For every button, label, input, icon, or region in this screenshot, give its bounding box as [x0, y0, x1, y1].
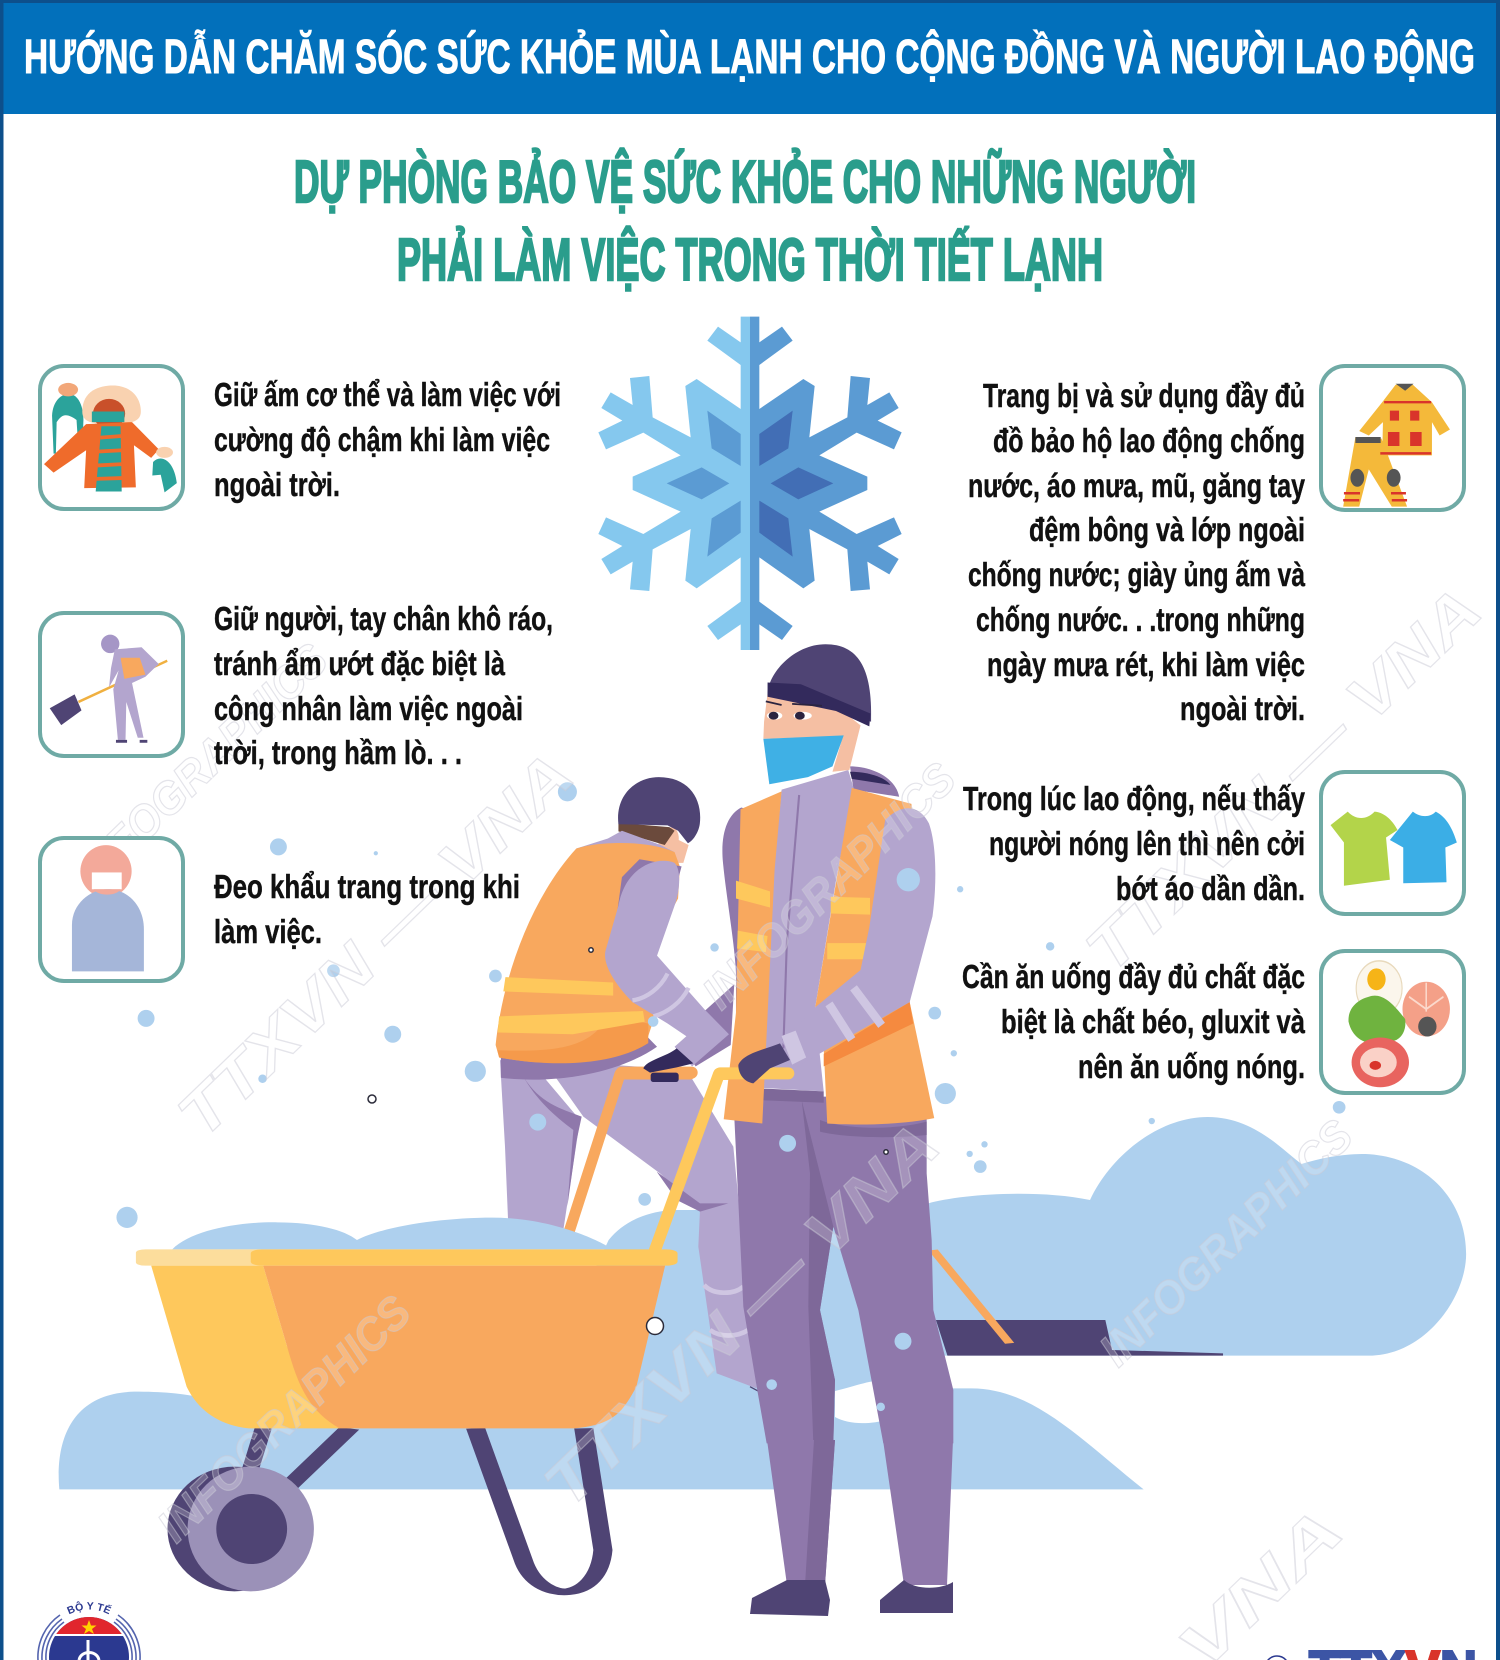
tip text 1: Giữ ấm cơ thể và làm việc với — [214, 376, 561, 413]
icon frame: protective gear — [1321, 366, 1464, 510]
tip text 5: bớt áo dần dần. — [1116, 870, 1305, 907]
watermarks: INFOGRAPHICS — [692, 752, 966, 1019]
watermarks: INFOGRAPHICS — [147, 1285, 421, 1552]
tip text 4: chống nước; giày ủng ấm và — [968, 556, 1305, 593]
small outlined circles — [368, 948, 888, 1334]
icon: protective suit — [1343, 384, 1450, 507]
yellow cross handle and front glove — [720, 1043, 790, 1083]
tip text 1 — [214, 376, 561, 503]
wheelbarrow — [136, 1074, 785, 1592]
icon: two t-shirts — [1331, 812, 1457, 886]
tip text 6: nên ăn uống nóng. — [1078, 1048, 1305, 1085]
tip text 6: Cần ăn uống đầy đủ chất đặc — [962, 958, 1305, 995]
tip text 6 — [962, 958, 1305, 1085]
tip text 3: Đeo khẩu trang trong khi — [214, 868, 520, 905]
icon frame: shirts — [1321, 772, 1464, 914]
icon: person wearing mask — [72, 845, 144, 971]
icon: snowflake — [598, 317, 902, 650]
panel: tip nutrition — [962, 951, 1464, 1093]
icon: egg, salmon, lettuce and meat — [1348, 961, 1450, 1087]
icon frame: mask — [40, 838, 183, 981]
tip text 4: đồ bảo hộ lao động chống — [993, 422, 1305, 459]
wheelbarrow frame and wheel — [167, 1428, 603, 1592]
panel: tip protective gear — [968, 366, 1464, 727]
wheelbarrow handles — [569, 1074, 785, 1250]
tip text 6: biệt là chất béo, gluxit và — [1001, 1003, 1305, 1040]
back worker legs — [500, 1060, 759, 1392]
tip text 2: tránh ẩm ướt đặc biệt là — [214, 645, 505, 682]
snow hills background — [59, 1117, 1466, 1489]
icon frame: keep dry — [40, 613, 183, 756]
front worker boots — [750, 1580, 953, 1616]
vest — [724, 788, 934, 1125]
tip text 4: ngày mưa rét, khi làm việc — [987, 646, 1305, 683]
tip text 4: Trang bị và sử dụng đầy đủ — [983, 377, 1305, 414]
icon frame: food — [1321, 951, 1464, 1093]
tip text 4: nước, áo mưa, mũ, găng tay — [968, 467, 1305, 504]
tip text 1: ngoài trời. — [214, 466, 340, 503]
shovel — [933, 1250, 1223, 1356]
tip text 5: người nóng lên thì nên cởi — [989, 825, 1305, 862]
tip text 4: đệm bông và lớp ngoài — [1029, 511, 1305, 548]
sleeve — [782, 808, 935, 1066]
snow dots — [116, 782, 1345, 1411]
tip text 3 — [214, 868, 520, 950]
tip text 2: công nhân làm việc ngoài — [214, 690, 523, 727]
watermarks: TTXVN — VNA — [531, 1110, 953, 1521]
front worker — [622, 644, 953, 1616]
tip text 1: cường độ chậm khi làm việc — [214, 421, 550, 458]
header banner — [0, 0, 1500, 114]
subtitle — [294, 148, 1196, 293]
panel: tip keep dry — [40, 600, 553, 771]
tip text 2: trời, trong hầm lò. . . — [214, 734, 462, 771]
front worker upper body — [722, 644, 935, 1125]
logo: Ministry of Health — [37, 1601, 141, 1660]
icon frame: warm clothes — [40, 366, 183, 509]
watermarks: TTXVN — VNA — [165, 740, 587, 1151]
watermarks: INFOGRAPHICS — [64, 633, 338, 900]
tip text 2 — [214, 600, 553, 771]
panel: tip warm clothes — [40, 366, 561, 509]
tip text 3: làm việc. — [214, 913, 322, 950]
watermarks: INFOGRAPHICS — [1089, 1109, 1363, 1376]
front worker trousers — [733, 1097, 953, 1585]
tip text 5 — [963, 780, 1305, 907]
panel: tip wear mask — [40, 838, 520, 981]
tip text 5: Trong lúc lao động, nếu thấy — [963, 780, 1305, 817]
icon: winter coat, hat and mitten — [44, 383, 177, 492]
logo: Ministry of Health: BỘ Y TẾ — [66, 1601, 112, 1614]
icon: worker with shovel — [50, 635, 167, 743]
tip text 4: chống nước. . .trong những — [976, 601, 1305, 638]
tip text 4: ngoài trời. — [1180, 690, 1305, 727]
watermarks — [64, 575, 1495, 1660]
tip text 2: Giữ người, tay chân khô ráo, — [214, 600, 553, 637]
tip text 4 — [968, 377, 1305, 727]
back worker torso and head — [496, 777, 734, 1080]
back worker — [496, 777, 759, 1392]
panel: tip remove layers — [963, 772, 1464, 914]
watermarks: TTXVN — VNA — [1073, 575, 1495, 986]
head and face — [763, 644, 871, 784]
orange handle grip and rear glove — [622, 1048, 693, 1082]
wheelbarrow tub with snow — [136, 1218, 678, 1428]
